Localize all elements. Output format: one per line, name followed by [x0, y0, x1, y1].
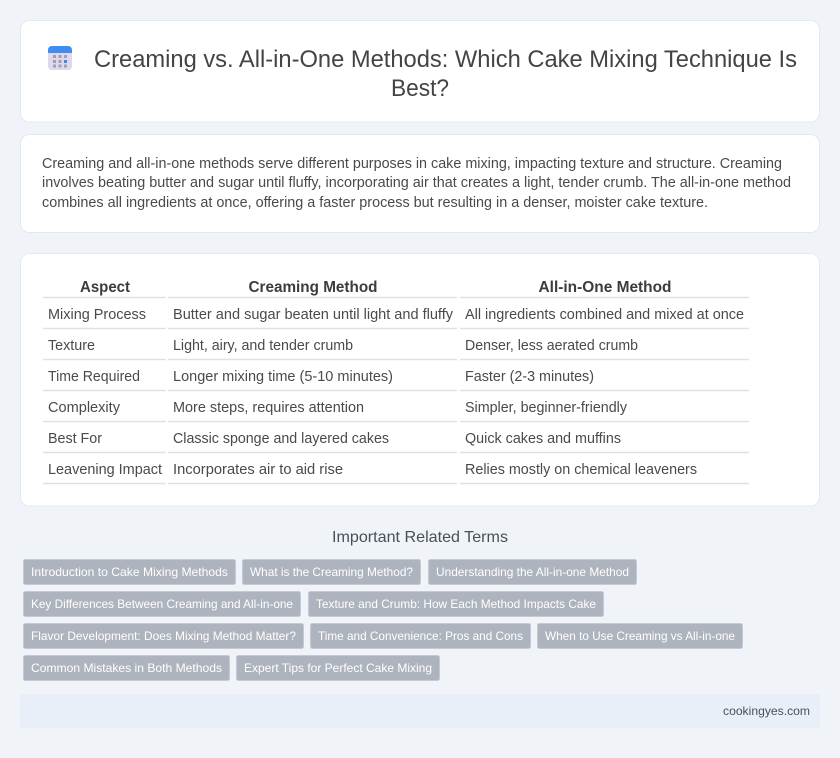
- table header: All-in-One Method: [538, 279, 672, 296]
- row: texture: Texture: [48, 338, 95, 354]
- row: leavening impact: Incorporates air to aid rise: [173, 462, 343, 478]
- footer: cookingyes.com: [723, 704, 810, 718]
- row: mixing process: Butter and sugar beaten until light and fluffy: [173, 307, 454, 323]
- title: [94, 46, 797, 102]
- row: texture: [48, 338, 638, 354]
- table header: Aspect: [80, 279, 131, 296]
- tag: When to Use Creaming vs All-in-one: [545, 629, 735, 643]
- title: Creaming vs. All-in-One Methods: Which Cake Mixing Technique Is: [94, 46, 797, 73]
- icon: calendar: [48, 46, 72, 70]
- row: time required: Faster (2-3 minutes): [465, 369, 594, 385]
- row: texture: Light, airy, and tender crumb: [173, 338, 353, 354]
- tag: Expert Tips for Perfect Cake Mixing: [244, 661, 432, 675]
- panel: intro text: involves beating butter and sugar until fluffy, incorporating air that creates a light, tender crumb. The all-in-one method: [42, 175, 791, 191]
- tag: [310, 624, 530, 648]
- tag: Flavor Development: Does Mixing Method Matter?: [31, 629, 296, 643]
- tag: [242, 560, 420, 584]
- panel: intro text: [20, 134, 820, 232]
- tag: [24, 624, 304, 648]
- table header: [80, 279, 672, 296]
- tag: Key Differences Between Creaming and All-in-one: [31, 597, 293, 611]
- related term tags: [24, 560, 742, 680]
- tag: Understanding the All-in-one Method: [436, 565, 629, 579]
- row: leavening impact: [48, 462, 697, 478]
- row: leavening impact: Relies mostly on chemical leaveners: [465, 462, 697, 478]
- row: complexity: Complexity: [48, 400, 121, 416]
- tag: [428, 560, 636, 584]
- footer: [20, 694, 820, 728]
- panel: comparison table: [20, 254, 820, 506]
- tag: Texture and Crumb: How Each Method Impacts Cake: [316, 597, 596, 611]
- row: best for: Best For: [48, 431, 102, 447]
- panel: header: [20, 20, 820, 122]
- row: best for: [48, 431, 621, 447]
- tag: [24, 560, 236, 584]
- heading: important related terms: Important Related Terms: [332, 529, 508, 546]
- row: mixing process: [48, 307, 744, 323]
- table header: Creaming Method: [248, 279, 378, 296]
- row: mixing process: Mixing Process: [48, 307, 146, 323]
- tag: [538, 624, 742, 648]
- tag: Introduction to Cake Mixing Methods: [31, 565, 228, 579]
- panel: intro text: Creaming and all-in-one methods serve different purposes in cake mixing, impacting texture and structure. Creaming: [42, 156, 782, 172]
- title: Best?: [391, 75, 449, 102]
- panel: intro text: combines all ingredients at once, offering a faster process but resulting in a denser, moister cake texture.: [42, 195, 708, 211]
- row: mixing process: All ingredients combined and mixed at once: [465, 307, 744, 323]
- tag: [24, 656, 230, 680]
- row: time required: Longer mixing time (5-10 minutes): [173, 369, 393, 385]
- tag: [308, 592, 604, 616]
- tag: Time and Convenience: Pros and Cons: [318, 629, 523, 643]
- row: best for: Quick cakes and muffins: [465, 431, 621, 447]
- row: complexity: [48, 400, 628, 416]
- row: best for: Classic sponge and layered cakes: [173, 431, 389, 447]
- row: leavening impact: Leavening Impact: [48, 462, 162, 478]
- tag: What is the Creaming Method?: [250, 565, 413, 579]
- tag: Common Mistakes in Both Methods: [31, 661, 222, 675]
- row: texture: Denser, less aerated crumb: [465, 338, 638, 354]
- row: time required: [48, 369, 594, 385]
- tag: [236, 656, 440, 680]
- row: complexity: More steps, requires attention: [173, 400, 364, 416]
- row: time required: Time Required: [48, 369, 140, 385]
- tag: [24, 592, 300, 616]
- row: complexity: Simpler, beginner-friendly: [465, 400, 628, 416]
